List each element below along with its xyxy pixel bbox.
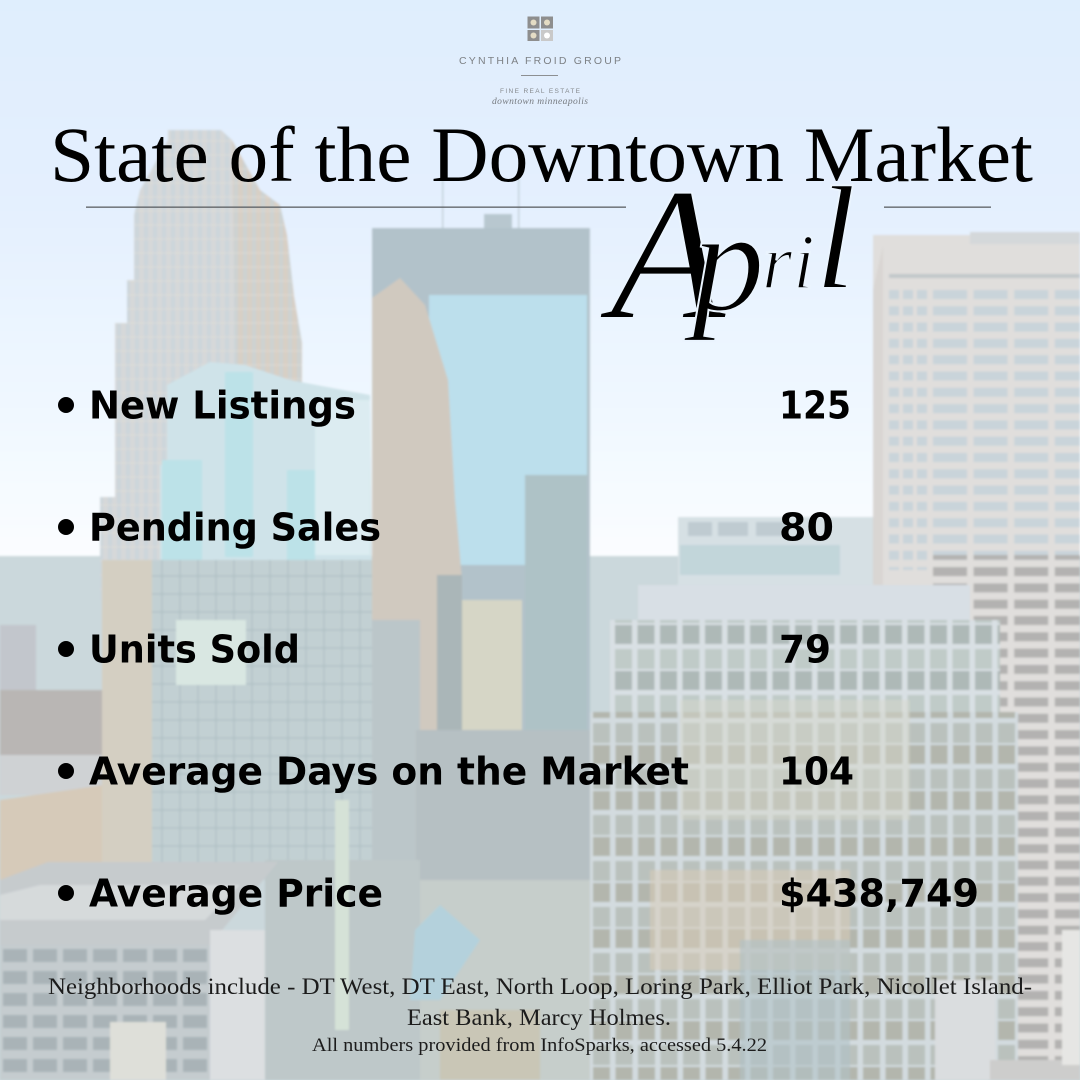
logo icon: [528, 16, 553, 41]
logo tagline: FINE REAL ESTATE: [500, 88, 581, 95]
stat: average days on the market: Average Days on the Market: [89, 750, 689, 794]
sky: [0, 0, 1080, 560]
far-left low buildings: [0, 625, 104, 880]
footnote: source: All numbers provided from InfoSparks, accessed 5.4.22: [312, 1035, 767, 1056]
lower-right white blocks: [935, 930, 1080, 1080]
footnote: neighborhoods: Neighborhoods include - DT West, DT East, North Loop, Loring Park, Elliot Park, Nicollet Island-: [48, 974, 1032, 1000]
horizon land: [0, 556, 1080, 1080]
month script heading: i: [793, 218, 815, 305]
left tower: [100, 130, 302, 600]
logo location: downtown minneapolis: [492, 97, 588, 107]
footnote: neighborhoods: East Bank, Marcy Holmes.: [407, 1005, 671, 1031]
stat: average price: $438,749: [779, 872, 979, 916]
right tall tower: [873, 232, 1080, 1080]
front glass office building: [590, 585, 1018, 1080]
lower-left rooftop building: [0, 860, 420, 1080]
stat: new listings: New Listings: [89, 384, 356, 428]
lower-centre streets: [335, 800, 590, 1080]
mid-left glass towers: [102, 560, 590, 890]
logo name: CYNTHIA FROID GROUP: [459, 55, 621, 67]
teal glass building: [160, 362, 372, 600]
title: State of the Downtown Market: [50, 111, 1033, 198]
stat: pending sales: Pending Sales: [89, 506, 381, 550]
stat: new listings: 125: [779, 384, 851, 428]
footnote: neighborhoods: [48, 974, 1032, 1031]
stat: units sold: 79: [779, 628, 831, 672]
month script heading: r: [762, 218, 793, 305]
stat: pending sales: 80: [779, 506, 834, 550]
month script heading: A: [599, 150, 727, 360]
stat: average days on the market: 104: [779, 750, 854, 794]
stat: units sold: Units Sold: [89, 628, 300, 672]
central dark glass tower: [372, 170, 590, 748]
logo: Cynthia Froid Group: [459, 16, 621, 107]
stat: pending sales: [58, 506, 834, 550]
mid-rear building: [678, 517, 873, 592]
month script heading: p: [683, 182, 764, 342]
stat: new listings: [58, 384, 851, 428]
stat: units sold: [58, 628, 831, 672]
stat: average price: Average Price: [89, 872, 383, 916]
stat: average price: [58, 872, 979, 916]
month script heading: l: [815, 157, 856, 321]
